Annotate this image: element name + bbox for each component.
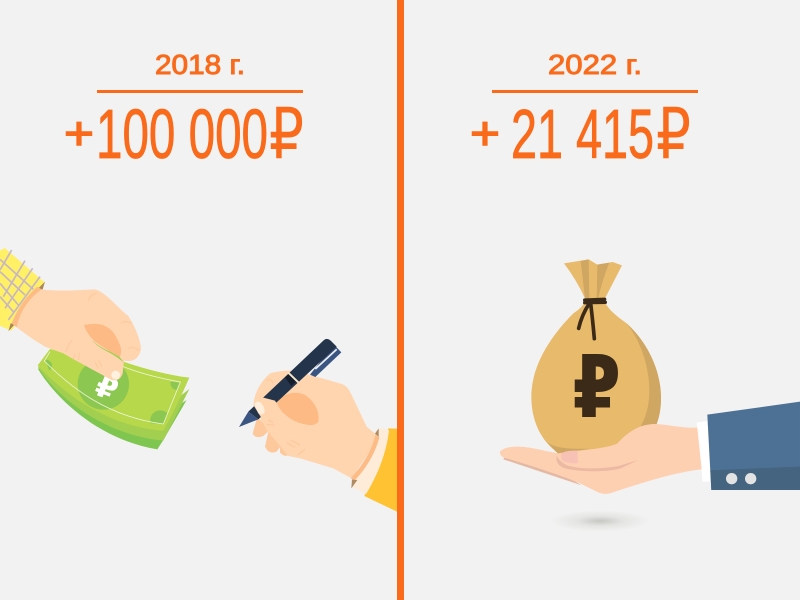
amount 100 000 rubles: ₽ <box>269 95 304 173</box>
banknote stack: ₽ <box>90 369 123 409</box>
amount 21 415 rubles: 21 415 <box>511 95 654 173</box>
rule 2018 <box>97 90 303 93</box>
suit sleeve <box>697 402 800 490</box>
knuckle creases <box>267 380 305 455</box>
knuckle creases <box>66 293 139 368</box>
open hand <box>500 424 702 494</box>
hand <box>253 371 379 478</box>
cuff shadows <box>351 428 379 488</box>
ground shadow <box>550 510 650 532</box>
thumb nail <box>254 402 265 415</box>
amount 21 415 rubles: ₽ <box>656 95 691 173</box>
banknote stack <box>38 349 189 449</box>
pen <box>239 339 341 427</box>
amount 100 000 rubles: + <box>64 107 94 159</box>
ruble sign: ₽ <box>573 338 620 437</box>
bill flap <box>92 340 124 363</box>
thumb nail <box>111 371 120 379</box>
plaid sleeve <box>0 248 45 331</box>
thumb crease <box>556 456 638 471</box>
hand <box>17 289 141 380</box>
cuff buttons <box>726 473 737 484</box>
year 2022: 2022 г. <box>548 49 642 80</box>
back fingers <box>253 417 290 456</box>
icon: hand giving banknotes <box>0 248 189 449</box>
money bag <box>531 259 661 454</box>
amount 21 415 rubles: + <box>470 107 500 159</box>
panel: 2022 heading <box>470 49 698 173</box>
thumb nail <box>561 451 578 463</box>
palm shadow <box>84 324 121 357</box>
wrist shadow <box>12 287 42 327</box>
shirt cuff <box>352 428 389 494</box>
year 2018: 2018 г. <box>155 49 245 80</box>
amount 100 000 rubles: 100 000 <box>96 95 268 173</box>
wrist shadow <box>351 435 379 480</box>
icon: hand writing with pen <box>239 339 397 512</box>
yellow sleeve <box>364 428 397 512</box>
icon: hand holding money bag <box>500 259 800 532</box>
palm shadow <box>277 393 319 425</box>
thumb over pen <box>253 398 287 423</box>
center divider <box>397 0 404 600</box>
tie <box>585 299 605 303</box>
panel: 2018 heading <box>64 49 304 173</box>
rule 2022 <box>492 90 698 93</box>
